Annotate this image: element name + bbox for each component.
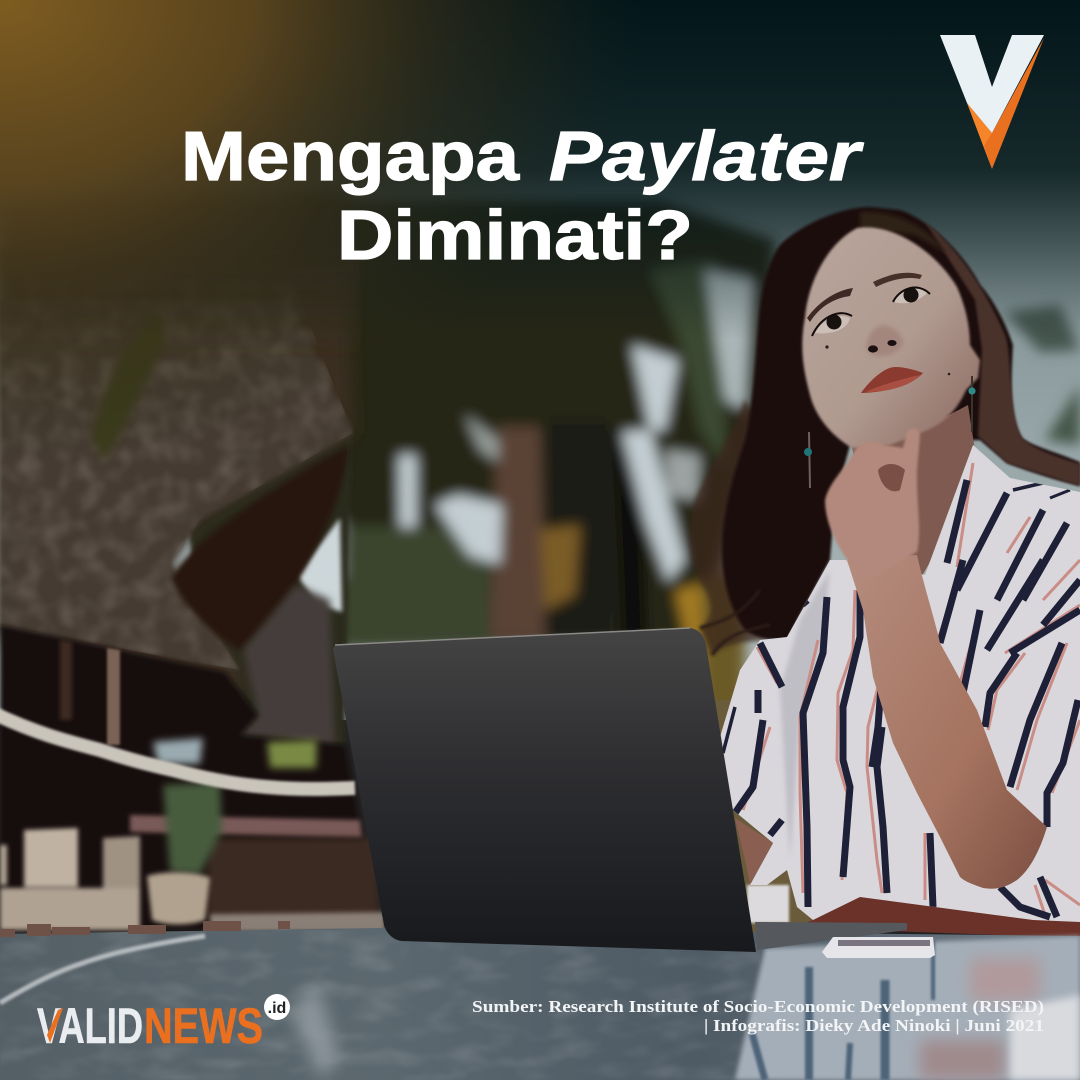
palm frond over roof (92, 310, 165, 460)
top dark gradient overlay (0, 0, 1080, 480)
laptop base (755, 922, 907, 950)
table highlight curve (0, 936, 205, 1003)
title: Paylater (549, 117, 864, 195)
hair tips (700, 590, 770, 655)
title (181, 117, 864, 274)
nose (866, 325, 903, 356)
hair back (722, 207, 1080, 640)
second roof (240, 585, 335, 745)
shirt stripes (723, 463, 1080, 917)
phone (822, 937, 935, 958)
logo: VALIDNEWS.id (37, 994, 290, 1054)
lips (861, 367, 923, 393)
skirt (800, 895, 1080, 938)
earrings (804, 376, 976, 488)
laptop lid (333, 628, 756, 952)
woman reflection (735, 936, 1080, 1080)
foliage behind roof (170, 420, 352, 745)
wispy hair (689, 400, 790, 655)
source credit (472, 997, 1044, 1035)
window glare (290, 985, 340, 1078)
eyes and brows (807, 273, 950, 375)
laptop (333, 628, 935, 958)
lower backdrop behind woman (700, 700, 820, 940)
plant (163, 782, 222, 875)
right arm (847, 555, 1047, 889)
backdrop under arm (747, 885, 789, 923)
planters (0, 828, 210, 930)
title: Mengapa (181, 117, 520, 195)
shirt (720, 445, 1080, 922)
hand (825, 429, 920, 582)
pebbles (0, 921, 290, 937)
palm trees (300, 200, 1080, 730)
roof underside (172, 446, 348, 650)
sky gaps through fronds (330, 345, 700, 582)
shirt fold shading (780, 570, 830, 860)
source credit: | Infografis: Dieky Ade Ninoki | Juni 2021 (704, 1016, 1044, 1035)
logo: V mark (940, 35, 1044, 169)
face (802, 227, 980, 448)
left forearm (735, 818, 773, 884)
thatched roof (0, 190, 360, 700)
source credit: Sumber: Research Institute of Socio-Economic Development (RISED) (472, 997, 1044, 1016)
left sky gap (297, 518, 342, 612)
woman (689, 207, 1080, 938)
neck (850, 405, 978, 585)
table and bench (130, 815, 362, 838)
marble table (0, 921, 1080, 1080)
shaded veranda (0, 625, 380, 930)
rope railing (0, 714, 355, 789)
sky (0, 0, 1080, 720)
logo: VALIDNEWS.id: VALID (37, 998, 143, 1054)
logo: VALIDNEWS.id: .id (268, 1000, 286, 1017)
title: Diminati? (337, 196, 693, 274)
logo: VALIDNEWS.id: NEWS (144, 998, 263, 1054)
hair lighter side (925, 222, 1080, 486)
